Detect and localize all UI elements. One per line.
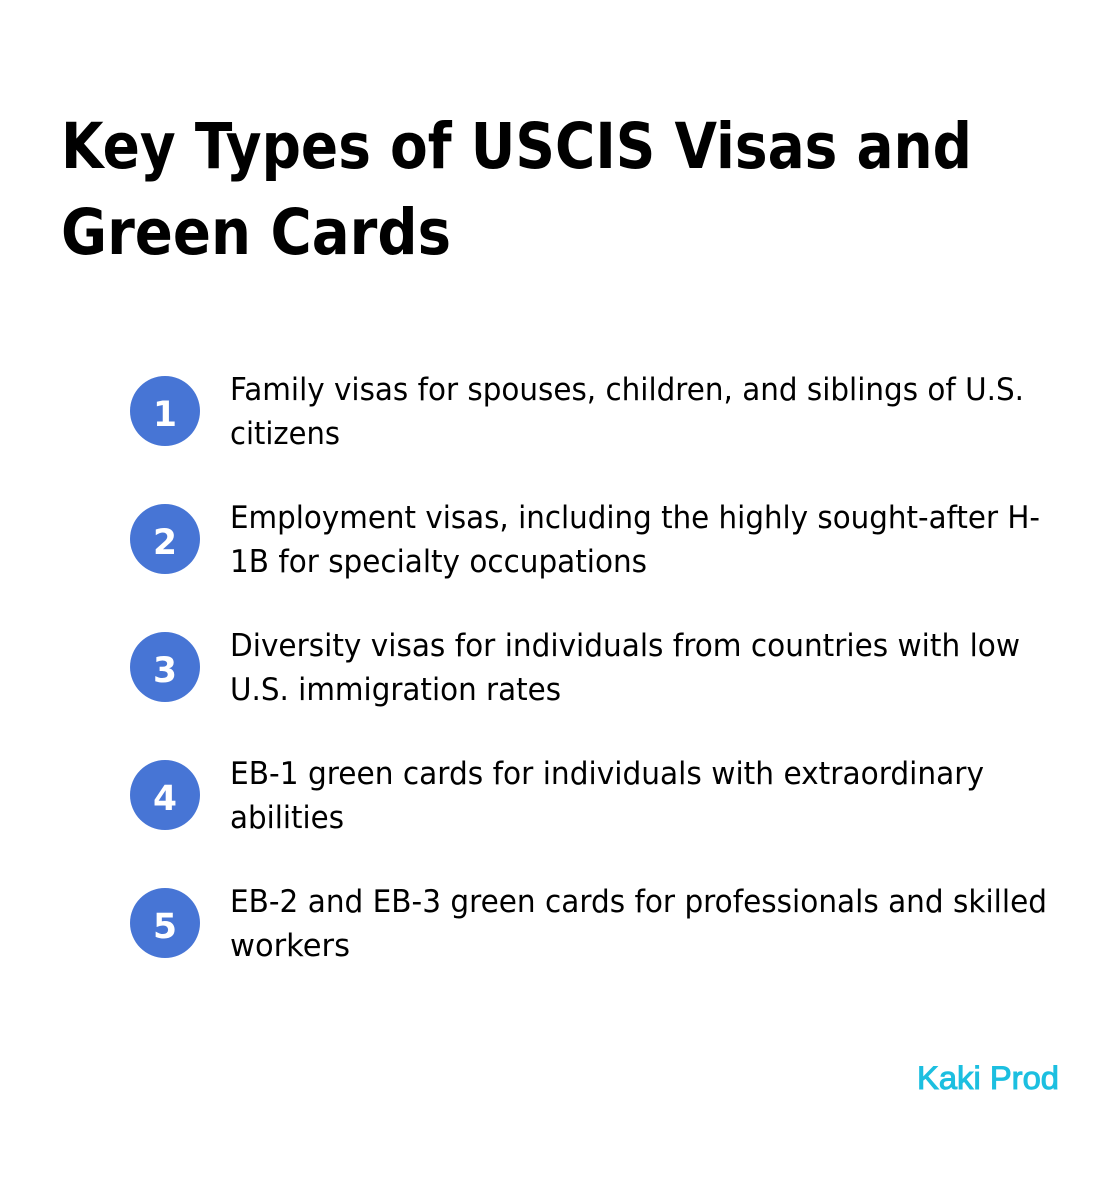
text: family visas: Family visas for spouses, children, and siblings of U.S. [230,372,1024,408]
icon: number badge 2: 2 [153,523,177,563]
icon: number badge 3: 3 [153,651,177,691]
text: EB-1 green cards [230,756,984,836]
title: Key Types of USCIS Visas and [61,110,972,183]
text: EB-2 and EB-3 green cards: EB-2 and EB-3 green cards for professionals and skilled [230,884,1047,920]
text: EB-1 green cards: abilities [230,800,344,836]
logo: Kaki Prod: Kaki Prod [917,1060,1059,1096]
text: family visas [230,372,1024,452]
icon: number badge 5: 5 [153,907,177,947]
icon: number badge 2 [130,504,200,574]
list item 2 [130,500,1040,580]
list item 3 [130,628,1020,708]
icon: number badge 4: 4 [153,779,177,819]
list item 1 [130,372,1024,452]
text: employment visas [230,500,1040,580]
icon: number badge 1: 1 [153,395,177,435]
icon: number badge 4 [130,760,200,830]
text: diversity visas: Diversity visas for individuals from countries with low [230,628,1020,664]
list item 4 [130,756,984,836]
text: diversity visas: U.S. immigration rates [230,672,561,708]
text: diversity visas [230,628,1020,708]
list item 5 [130,884,1047,964]
text: EB-2 and EB-3 green cards: workers [230,928,350,964]
text: employment visas: Employment visas, including the highly sought-after H- [230,500,1040,536]
title: Green Cards [61,196,451,269]
text: EB-1 green cards: EB-1 green cards for individuals with extraordinary [230,756,984,792]
icon: number badge 5 [130,888,200,958]
icon: number badge 1 [130,376,200,446]
text: employment visas: 1B for specialty occupations [230,544,647,580]
icon: number badge 3 [130,632,200,702]
text: family visas: citizens [230,416,340,452]
text: EB-2 and EB-3 green cards [230,884,1047,964]
title [61,110,972,269]
